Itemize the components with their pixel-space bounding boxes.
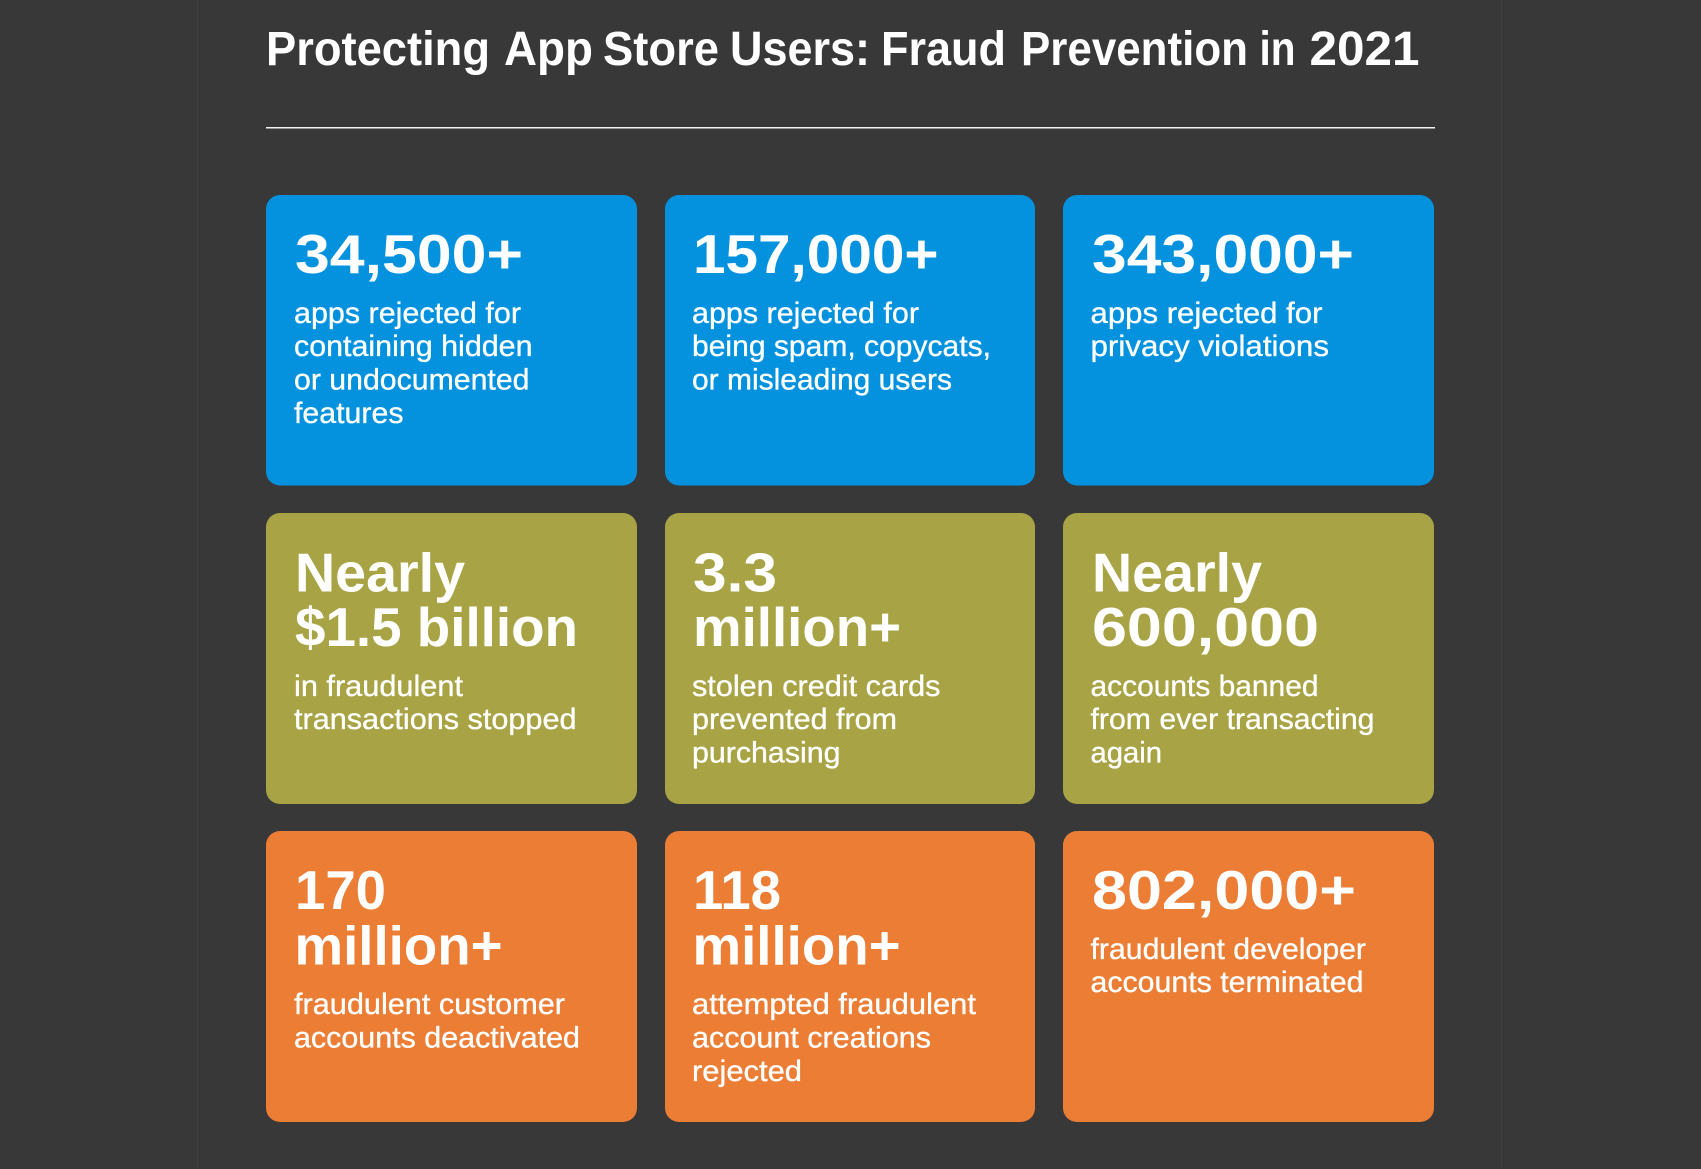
description: accounts banned: from ever transacting [1090,703,1374,736]
stat: 3.3 million+: 3.3 [693,542,777,604]
card: fraudulent transactions stopped [266,513,637,804]
stat: 118 million+: million+ [692,914,900,976]
description: spam and copycats: apps rejected for [692,297,919,330]
stat: 118 million+ [692,859,900,976]
title: Protecting [266,23,490,76]
description: hidden features: containing hidden [294,330,532,363]
description: creations rejected: rejected [692,1055,802,1088]
description: privacy violations: privacy violations [1090,330,1329,363]
stat: 343,000+: 343,000+ [1092,223,1354,285]
stat: 3.3 million+: million+ [693,596,901,658]
title: Store [603,23,719,76]
description: creations rejected: account creations [692,1022,931,1054]
stat: Nearly $1.5 billion: Nearly [295,542,465,604]
description: hidden features [294,297,532,430]
title [266,23,1420,76]
description: spam and copycats: or misleading users [692,364,952,396]
stat: 157,000+: 157,000+ [693,223,938,285]
stat: 170 million+: 170 [295,859,386,921]
stat: 802,000+: 802,000+ [1092,859,1356,921]
description: hidden features: apps rejected for [294,297,521,330]
stat: 118 million+: 118 [693,859,781,921]
description: spam and copycats [692,297,991,396]
title: App [504,23,593,76]
card: stolen credit cards [665,513,1035,804]
description: privacy violations [1090,297,1329,363]
description: developer accounts [1090,933,1366,999]
stat: Nearly 600,000: Nearly [1092,542,1262,604]
description: accounts banned [1090,670,1374,770]
description: accounts deactivated [294,988,580,1054]
description: stolen cards [692,670,940,770]
description: stolen cards: purchasing [692,736,840,770]
title: Users: [730,23,870,76]
description: transactions stopped: transactions stopped [294,703,576,736]
title: 2021 [1310,23,1420,76]
description: hidden features: features [294,397,404,430]
title: in [1260,23,1296,76]
description: transactions stopped: in fraudulent [294,670,464,703]
description: creations rejected: attempted fraudulent [692,988,977,1021]
stat: 170 million+: million+ [294,914,502,976]
description: developer accounts: accounts terminated [1090,966,1364,999]
description: developer accounts: fraudulent developer [1090,933,1366,966]
description: transactions stopped [294,670,576,736]
card: customer accounts deactivated [266,831,637,1122]
description: accounts banned: again [1090,736,1162,770]
card: developer accounts terminated [1063,831,1434,1122]
stat: Nearly 600,000: 600,000 [1092,596,1319,658]
card: account creations rejected [665,831,1035,1122]
card: apps rejected for privacy [1063,195,1434,486]
description: accounts deactivated: fraudulent customer [294,988,565,1021]
description: hidden features: or undocumented [294,364,530,396]
description: creations rejected [692,988,977,1088]
card: accounts banned [1063,513,1434,804]
title: Fraud [881,23,1006,76]
stat: Nearly 600,000 [1092,542,1319,658]
stat: 34,500+: 34,500+ [295,223,523,285]
stat: Nearly $1.5 billion: $1.5 billion [295,596,578,658]
stat: Nearly $1.5 billion [295,542,578,658]
card: apps rejected for hidden features [266,195,637,486]
description: privacy violations: apps rejected for [1090,297,1323,330]
description: spam and copycats: being spam, copycats, [692,330,991,363]
description: accounts deactivated: accounts deactivated [294,1022,580,1054]
description: stolen cards: prevented from [692,703,897,736]
stat: 170 million+ [294,859,502,976]
title: Prevention [1021,23,1248,76]
description: accounts banned: accounts banned [1090,670,1318,703]
stat: 3.3 million+ [693,542,901,658]
description: stolen cards: stolen credit cards [692,670,940,703]
card: apps rejected as spam [665,195,1035,486]
